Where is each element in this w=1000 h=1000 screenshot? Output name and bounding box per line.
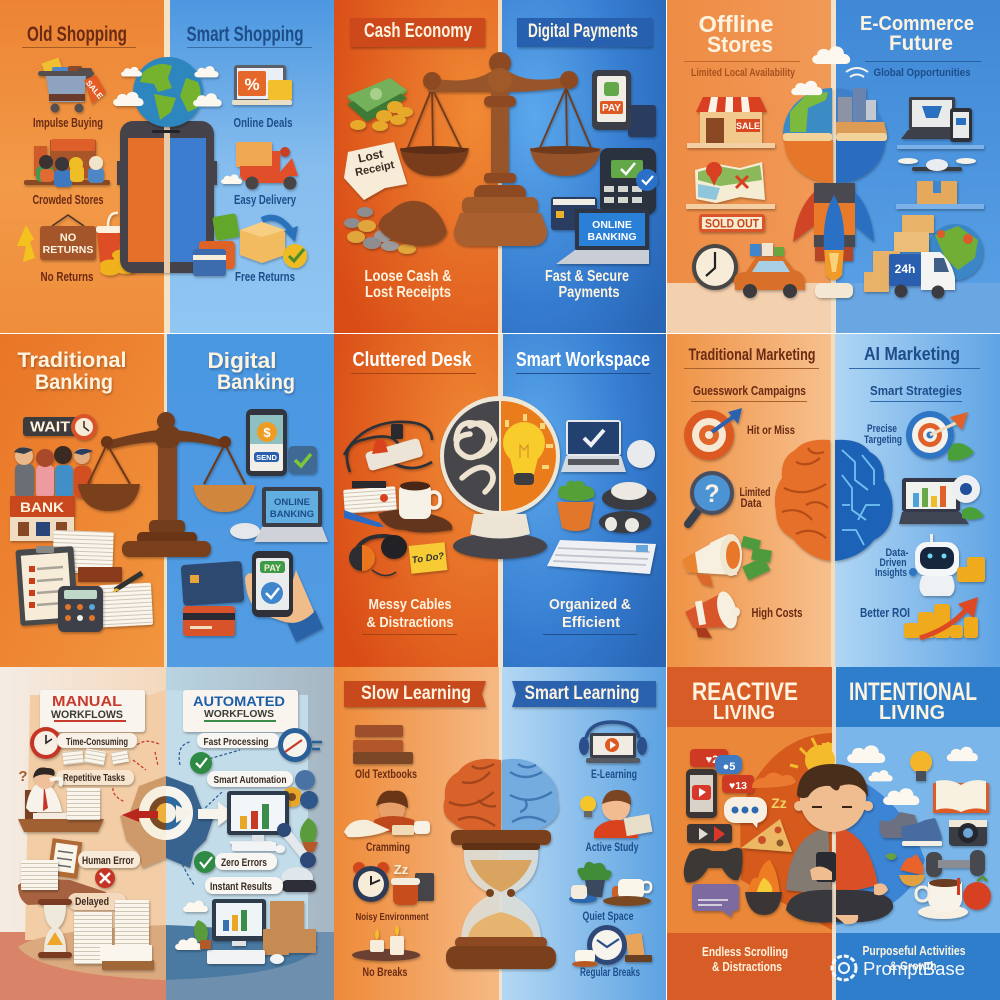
- icon: typing bubble: [724, 797, 767, 828]
- icon: red megaphone: [685, 589, 741, 638]
- icon: clouds red: [752, 772, 796, 788]
- icon: tablet mug with zz: [391, 862, 434, 905]
- icon: store: [687, 97, 775, 148]
- icon: keyboard and mouse: [207, 950, 284, 964]
- icon: online banking laptop: BANKING: [270, 509, 314, 520]
- icon: green check: [288, 446, 317, 474]
- icon: robot arm: [277, 823, 316, 892]
- sign: sold out: [699, 214, 765, 232]
- icon: potted plant: [557, 481, 594, 531]
- icon: mouse on pad: [602, 482, 656, 510]
- icon: pay phone and wallet card: PAY: [602, 103, 621, 114]
- heading: traditional banking: [18, 349, 126, 394]
- icon: cramming student: [344, 791, 430, 837]
- banner: automated workflows: AUTOMATED: [193, 693, 285, 709]
- label: and growth: & Growth: [890, 959, 936, 973]
- icon: noisy alarm clock: [353, 862, 389, 902]
- icon: video strip: [687, 824, 732, 843]
- pill: fast processing: Fast Processing: [204, 736, 268, 748]
- heading: smart shopping: Smart Shopping: [186, 23, 304, 46]
- icon: clipboard checklist: [15, 546, 79, 626]
- icon: no returns sign: NO: [60, 232, 77, 244]
- icon: chat window: [692, 884, 739, 917]
- icon: light bulb: [910, 751, 932, 781]
- banner: manual workflows: WORKFLOWS: [51, 709, 123, 721]
- icon: delivery truck: 24h: [895, 262, 915, 276]
- clouds: [847, 745, 978, 805]
- heading: intentional living: LIVING: [879, 702, 945, 724]
- label: payments: Payments: [558, 284, 620, 301]
- icon: phone pay with hand: [245, 551, 323, 642]
- phone with split screen: [117, 121, 217, 273]
- arrow: white: [198, 802, 234, 826]
- icon: toy car: [734, 243, 805, 298]
- panel: reactive vs intentional living: [667, 667, 1000, 1000]
- blue halo: [836, 770, 925, 925]
- icon: online deals laptop: %: [244, 75, 260, 94]
- icon: no returns sign: [40, 215, 96, 260]
- icon: drone with package: [896, 158, 984, 209]
- icon: dumbbell: [926, 850, 985, 877]
- heading ribbon: cash economy: Cash Economy: [364, 20, 473, 42]
- label: loose cash: Loose Cash &: [364, 268, 452, 285]
- label: regular breaks: Regular Breaks: [580, 965, 640, 979]
- label: impulse buying: Impulse Buying: [33, 116, 103, 130]
- shelf: [18, 879, 106, 905]
- icon: online banking laptop: ONLINE: [592, 219, 632, 231]
- icon: video phone: [686, 769, 717, 818]
- label: messy cables: Messy Cables: [368, 596, 452, 613]
- icon: loose coins: [344, 207, 416, 254]
- icon: coin stack: [100, 250, 137, 276]
- icon: queue of people: [14, 446, 93, 498]
- heading: e-commerce future: [860, 13, 974, 55]
- label: precise targeting: Targeting: [864, 434, 902, 446]
- heading: reactive living: REACTIVE: [692, 678, 798, 706]
- pill: delayed: [68, 893, 126, 910]
- icon: active study student: [580, 790, 652, 838]
- icon: wifi: [846, 68, 868, 77]
- heading: offline stores: Offline: [698, 11, 774, 37]
- orange sun halo: [740, 733, 832, 930]
- caption: global opportunities: Global Opportunities: [874, 67, 970, 79]
- label: and distractions: & Distractions: [712, 959, 782, 974]
- icon: lost receipt: [344, 142, 407, 200]
- icon: fire bowl: [745, 860, 782, 915]
- icon: online banking laptop: BANKING: [588, 231, 636, 243]
- icon: globe with pins: [927, 224, 983, 280]
- icon: credit card: [551, 197, 597, 230]
- icon: drink cup: [96, 213, 122, 262]
- heading: offline stores: [698, 11, 774, 57]
- label: limited data: [740, 485, 770, 510]
- sign: wait with clock: [23, 414, 97, 440]
- heading: offline stores: Stores: [707, 32, 773, 57]
- pill: fast processing: [197, 733, 279, 748]
- label: endless scrolling: Endless Scrolling: [702, 944, 788, 959]
- icon: sun: [790, 738, 835, 775]
- dashed red arrows: [113, 741, 159, 802]
- icon: plant: [300, 818, 318, 852]
- panel: cluttered desk vs smart workspace: [334, 334, 666, 667]
- pill: time-consuming: Time-Consuming: [66, 736, 128, 748]
- icon: paper stacks: [52, 530, 153, 627]
- icon: free returns box: [212, 213, 307, 268]
- icon: cash stack: [347, 78, 413, 131]
- heading: digital banking: Banking: [217, 371, 295, 394]
- icon: to do note: To Do?: [411, 551, 445, 566]
- icon: keyboard: [547, 540, 656, 574]
- icon: clouds: [791, 46, 850, 95]
- icon: results monitor: [212, 899, 266, 946]
- label: purposeful activities: Purposeful Activities: [862, 943, 966, 958]
- banner: manual workflows: [40, 690, 145, 732]
- icon: chart laptop: [899, 475, 984, 524]
- icon: camera: [949, 820, 987, 846]
- icon: candles: [352, 925, 420, 961]
- watermark: promptbase: PromptBase: [863, 959, 965, 979]
- icon: gears: [282, 770, 318, 809]
- label: data-driven insights: Insights: [875, 567, 907, 579]
- icon: apple: [963, 877, 991, 910]
- icon: online banking laptop: [556, 209, 649, 264]
- icon: crowded store: [24, 139, 110, 187]
- icon: open book: [933, 780, 989, 813]
- icon: laptop with check: [561, 420, 626, 472]
- pill: zero errors: [194, 851, 277, 873]
- label: active study: Active Study: [586, 840, 639, 854]
- label: online deals: Online Deals: [234, 116, 293, 130]
- icon: shopping cart: [38, 57, 106, 112]
- icon: tall paper stack: [67, 788, 100, 820]
- icon: split brain: [775, 440, 893, 561]
- icon: card terminal: [600, 148, 658, 214]
- label: no breaks: No Breaks: [362, 965, 408, 979]
- banner: automated workflows: WORKFLOWS: [204, 708, 274, 720]
- icon: laptop shop: [897, 97, 984, 149]
- icon: cloud and plant: [175, 901, 211, 950]
- heading: old shopping: Old Shopping: [27, 23, 127, 46]
- icon: gold coins: [957, 557, 985, 582]
- icon: social bubbles: ♥13: [729, 780, 747, 792]
- pill: repetitive tasks: [56, 770, 134, 785]
- label: precise targeting: Precise: [867, 423, 897, 435]
- label: no returns: No Returns: [40, 270, 94, 284]
- dashed blue arrows: [179, 742, 240, 886]
- heading: e-commerce future: Future: [889, 32, 953, 55]
- pill: instant results: Instant Results: [210, 881, 272, 893]
- icon: wrist rest with mice: [599, 511, 651, 533]
- pill: smart automation: [207, 771, 293, 787]
- icon: orange target: [684, 408, 742, 460]
- panel: old vs smart shopping: [0, 0, 334, 333]
- heading: intentional living: [849, 678, 977, 724]
- icon: credit cards: [181, 561, 244, 636]
- heading: reactive living: LIVING: [713, 702, 775, 724]
- heading: cluttered desk: Cluttered Desk: [352, 349, 472, 371]
- label: hit or miss: Hit or Miss: [747, 423, 795, 437]
- pill: delayed: Delayed: [75, 896, 109, 908]
- panel: traditional vs ai marketing: [667, 334, 1000, 667]
- heading ribbon: cash economy: [350, 18, 485, 47]
- label: old textbooks: Old Textbooks: [355, 767, 417, 781]
- icon: split brain: [444, 759, 558, 834]
- pill: instant results: [205, 877, 283, 894]
- sign: sold out: SOLD OUT: [705, 216, 760, 230]
- pill: zero errors: Zero Errors: [221, 857, 267, 869]
- icon: plant and tea cup: [569, 862, 651, 906]
- pill: smart automation: Smart Automation: [214, 774, 286, 786]
- icon: lightning bolt: [17, 225, 35, 262]
- icon: question magnifier: [688, 473, 732, 524]
- heading: traditional marketing: Traditional Marketing: [688, 345, 816, 364]
- icon: coins and growth arrow: [904, 597, 978, 638]
- panel: slow vs smart learning: [334, 667, 666, 1000]
- icon: map with pin: [686, 162, 775, 209]
- banner: manual workflows: MANUAL: [52, 693, 122, 710]
- icon: send phone: $: [263, 425, 271, 440]
- icon: boxes: [864, 215, 934, 292]
- label: precise targeting: [864, 423, 902, 446]
- icon: clock: [30, 727, 62, 759]
- heading: smart workspace: Smart Workspace: [516, 349, 650, 371]
- icon: store: SALE: [736, 121, 760, 131]
- icon: social bubbles: [690, 749, 754, 793]
- icon: globe with clouds: [113, 57, 222, 127]
- icon: social bubbles: ●5: [723, 761, 735, 773]
- label: limited data: Data: [740, 496, 762, 510]
- icon: rocket with half globe: [783, 88, 887, 298]
- balance scale: [78, 412, 255, 557]
- label: easy delivery: Easy Delivery: [234, 193, 296, 207]
- icon: delivery scooter: [221, 142, 298, 190]
- panel: offline stores vs e-commerce: [667, 0, 1000, 333]
- label: lost receipts: Lost Receipts: [365, 284, 451, 301]
- icon: megaphone with cash: [682, 534, 772, 587]
- icon: phone pay with hand: PAY: [264, 563, 281, 573]
- caption: limited local availability: Limited Local Availability: [691, 67, 796, 79]
- label: crowded stores: Crowded Stores: [32, 193, 104, 207]
- icon: lost receipt: Lost: [357, 147, 384, 166]
- icon: online banking laptop: ONLINE: [274, 497, 310, 508]
- icon: game controller: [684, 848, 742, 882]
- label: high costs: High Costs: [752, 606, 803, 620]
- pill: time-consuming: [57, 733, 137, 748]
- icon: split knot and bulb emblem: [440, 396, 560, 559]
- icon: split child: [786, 764, 893, 924]
- heading: traditional banking: Banking: [35, 371, 113, 394]
- heading ribbon: slow learning: Slow Learning: [361, 683, 471, 704]
- icon: green check badge: [190, 752, 212, 774]
- icon: break clock and books: [572, 925, 652, 967]
- caption: smart strategies: Smart Strategies: [870, 383, 962, 398]
- icon: shopping cart: SALE: [84, 79, 105, 101]
- icon: speedometer: [278, 728, 322, 762]
- label: noisy environment: Noisy Environment: [356, 912, 429, 923]
- icon: keyboard and mouse: [232, 842, 285, 853]
- caption: guesswork campaigns: Guesswork Campaigns: [693, 383, 806, 398]
- icon: social bubbles: ♥2: [706, 754, 718, 766]
- heading: digital banking: [208, 348, 295, 394]
- icon: paper stack: [343, 481, 397, 514]
- icon: clock: [692, 244, 738, 290]
- label: better roi: Better ROI: [860, 606, 910, 620]
- label: limited data: Limited: [740, 485, 770, 499]
- icon: online deals laptop: [232, 65, 292, 105]
- icon: cardboard boxes: [263, 901, 316, 955]
- icon: clipboard checklist: [48, 838, 82, 879]
- icon: robot: [909, 534, 959, 596]
- panel: manual vs automated workflows: [0, 667, 334, 1000]
- worker at desk: [18, 767, 104, 832]
- disc stage: [18, 925, 318, 980]
- icon: big paper stacks: [74, 900, 154, 970]
- icon: leaves and flame bowl: [885, 853, 925, 886]
- icon: leather bag: [378, 201, 447, 246]
- icon: scattered papers: [62, 748, 129, 766]
- label: organized and: Organized &: [549, 596, 631, 613]
- panel: traditional vs digital banking: [0, 334, 334, 667]
- icon: old textbooks: [353, 725, 413, 764]
- heading: e-commerce future: E-Commerce: [860, 13, 974, 35]
- icon: error x: [95, 868, 115, 888]
- pill: repetitive tasks: Repetitive Tasks: [63, 772, 125, 784]
- icon: coffee cup with note: [916, 878, 968, 919]
- icon: send phone: [246, 409, 287, 476]
- icon: e-learning video: [579, 722, 647, 763]
- icon: white blob device: [627, 440, 655, 468]
- label: data-driven insights: Driven: [880, 557, 907, 569]
- label: data-driven insights: Data-: [886, 547, 909, 559]
- icon: payment cards: [193, 241, 235, 276]
- label: and distractions: & Distractions: [366, 614, 454, 631]
- icon: bank building: [10, 496, 75, 541]
- heading: digital banking: Digital: [208, 348, 276, 373]
- heading: traditional banking: Traditional: [18, 349, 126, 372]
- label: quiet space: Quiet Space: [582, 911, 634, 923]
- panel: cash economy vs digital payments: [334, 0, 666, 333]
- heading: ai marketing: AI Marketing: [864, 344, 960, 364]
- watermark: promptbase: [832, 956, 965, 980]
- label: fast and secure: Fast & Secure: [545, 268, 629, 285]
- banner: automated workflows: [183, 690, 298, 732]
- sign: wait with clock: WAIT: [30, 418, 70, 436]
- icon: paper stack: [21, 860, 58, 890]
- label: e-learning: E-Learning: [591, 767, 637, 781]
- icon: lost receipt: Receipt: [354, 159, 396, 179]
- icon: pay phone and wallet card: [592, 70, 656, 137]
- balance scale: [400, 52, 601, 246]
- icon: cog wheel with red arrow: [120, 776, 214, 868]
- heading ribbon: digital payments: Digital Payments: [528, 21, 638, 42]
- label: cramming: Cramming: [366, 840, 410, 854]
- icon: no returns sign: RETURNS: [43, 244, 93, 256]
- label: data-driven insights: [875, 547, 909, 579]
- icon: blue target: [906, 411, 974, 460]
- label: efficient: Efficient: [562, 614, 620, 631]
- icon: online banking laptop: [230, 487, 328, 542]
- icon: bank building: BANK: [20, 499, 64, 515]
- icon: sneakers: [880, 812, 942, 846]
- icon: question magnifier: ?: [704, 480, 720, 508]
- question mark: ?: [18, 768, 28, 785]
- icon: tablet mug with zz: Zz: [394, 862, 409, 877]
- heading: reactive living: [692, 678, 798, 724]
- heading ribbon: digital payments: [517, 18, 652, 47]
- label: free returns: Free Returns: [235, 270, 295, 284]
- icon: blue pencil: [344, 510, 384, 527]
- heading ribbon: slow learning: [344, 681, 486, 707]
- text: zz: Zz: [771, 795, 787, 811]
- pill: human error: Human Error: [82, 855, 135, 867]
- icon: cable tangle power strip: [344, 422, 432, 472]
- icon: coffee mug with spill: [378, 482, 452, 532]
- heading ribbon: smart learning: Smart Learning: [524, 683, 640, 704]
- icon: dashboard monitor: [227, 791, 289, 844]
- icon: headphones: [349, 535, 407, 576]
- icon: delivery truck: [889, 252, 955, 298]
- icon: hourglass: [38, 899, 72, 958]
- icon: pizza slice: [741, 819, 792, 852]
- icon: calculator: [58, 586, 103, 632]
- icon: hourglass on stand: [446, 830, 556, 969]
- pill: human error: [78, 851, 140, 868]
- icon: to do note: [409, 542, 447, 574]
- icon: send phone: SEND: [256, 453, 277, 462]
